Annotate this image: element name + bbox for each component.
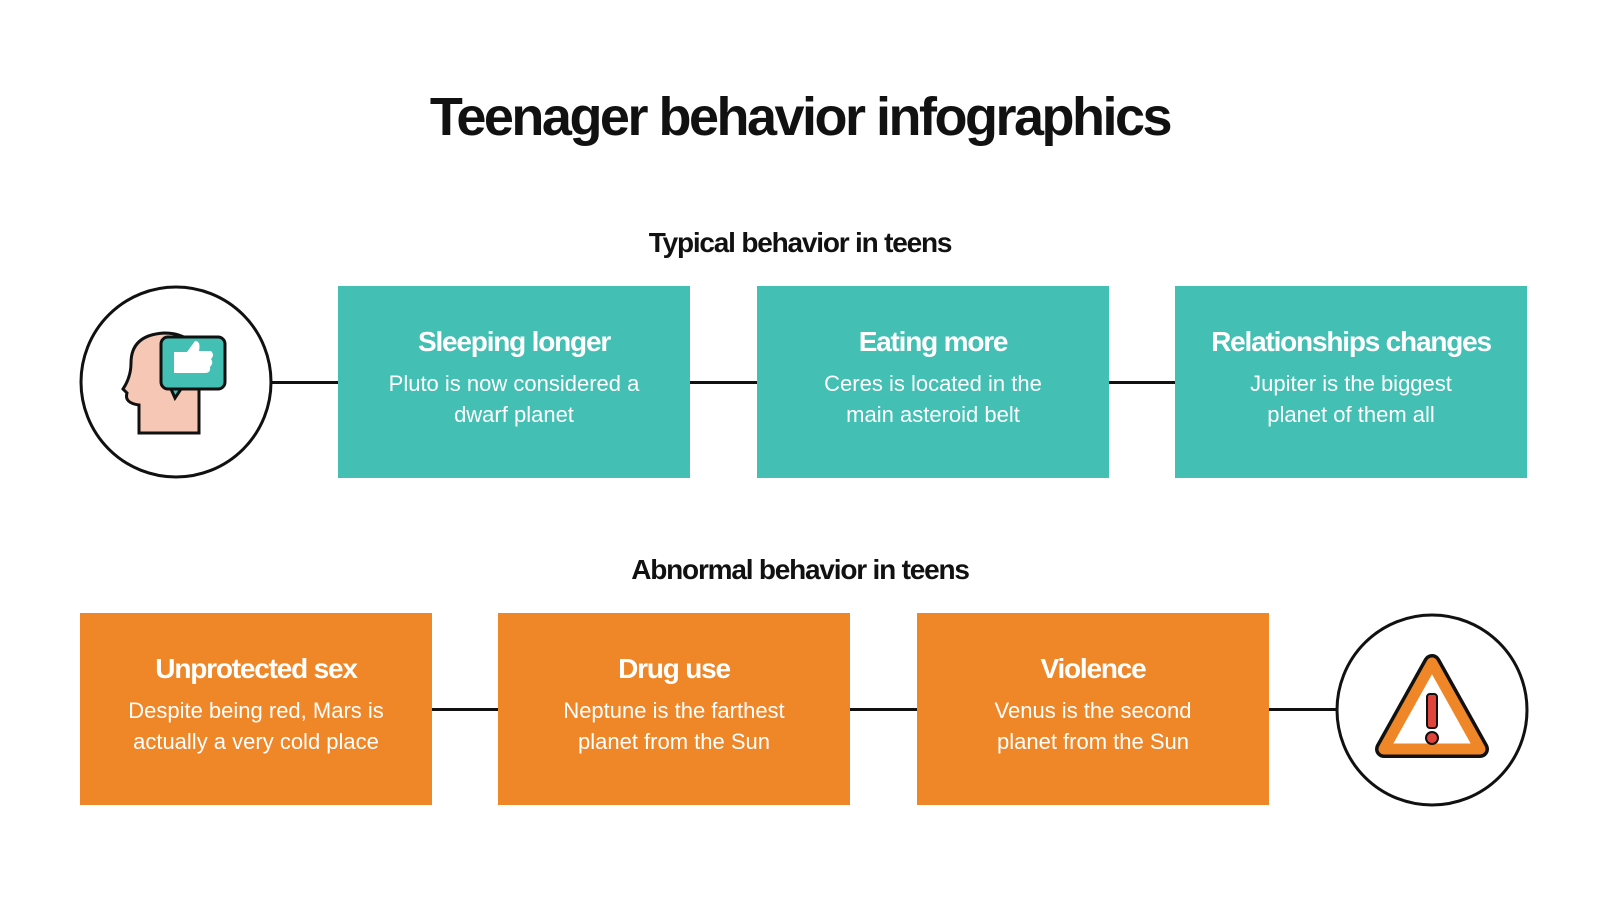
card: sleeping longer: dwarf planet xyxy=(454,402,574,427)
title: Teenager behavior infographics xyxy=(430,87,1170,147)
card: unprotected sex: actually a very cold place xyxy=(133,729,379,754)
card: relationships changes xyxy=(1175,286,1527,478)
connector lines top xyxy=(272,381,1512,384)
card: violence: Violence xyxy=(1040,653,1146,684)
card: unprotected sex: Despite being red, Mars is xyxy=(128,698,384,723)
card: violence: Venus is the second xyxy=(995,698,1191,723)
card: eating more: main asteroid belt xyxy=(846,402,1020,427)
card: drug use: Drug use xyxy=(618,653,730,684)
card: relationships changes: Jupiter is the biggest xyxy=(1250,371,1452,396)
card: sleeping longer: Pluto is now considered a xyxy=(389,371,639,396)
card: drug use: Neptune is the farthest xyxy=(563,698,785,723)
card: sleeping longer xyxy=(338,286,690,478)
card: eating more xyxy=(757,286,1109,478)
card: relationships changes: planet of them all xyxy=(1267,402,1435,427)
icon: head with thumbs up xyxy=(80,286,272,478)
card: unprotected sex: Unprotected sex xyxy=(155,653,357,684)
subheading: abnormal: Abnormal behavior in teens xyxy=(631,554,969,585)
card: violence: planet from the Sun xyxy=(997,729,1189,754)
card: relationships changes: Relationships changes xyxy=(1211,326,1491,357)
connector lines bottom xyxy=(90,708,1336,711)
icon: warning triangle xyxy=(1336,614,1528,806)
card: drug use: planet from the Sun xyxy=(578,729,770,754)
card: drug use xyxy=(498,613,850,805)
card: eating more: Eating more xyxy=(859,326,1007,357)
card: eating more: Ceres is located in the xyxy=(824,371,1042,396)
card: sleeping longer: Sleeping longer xyxy=(418,326,610,357)
subheading: typical: Typical behavior in teens xyxy=(649,227,951,258)
card: violence xyxy=(917,613,1269,805)
card: unprotected sex xyxy=(80,613,432,805)
